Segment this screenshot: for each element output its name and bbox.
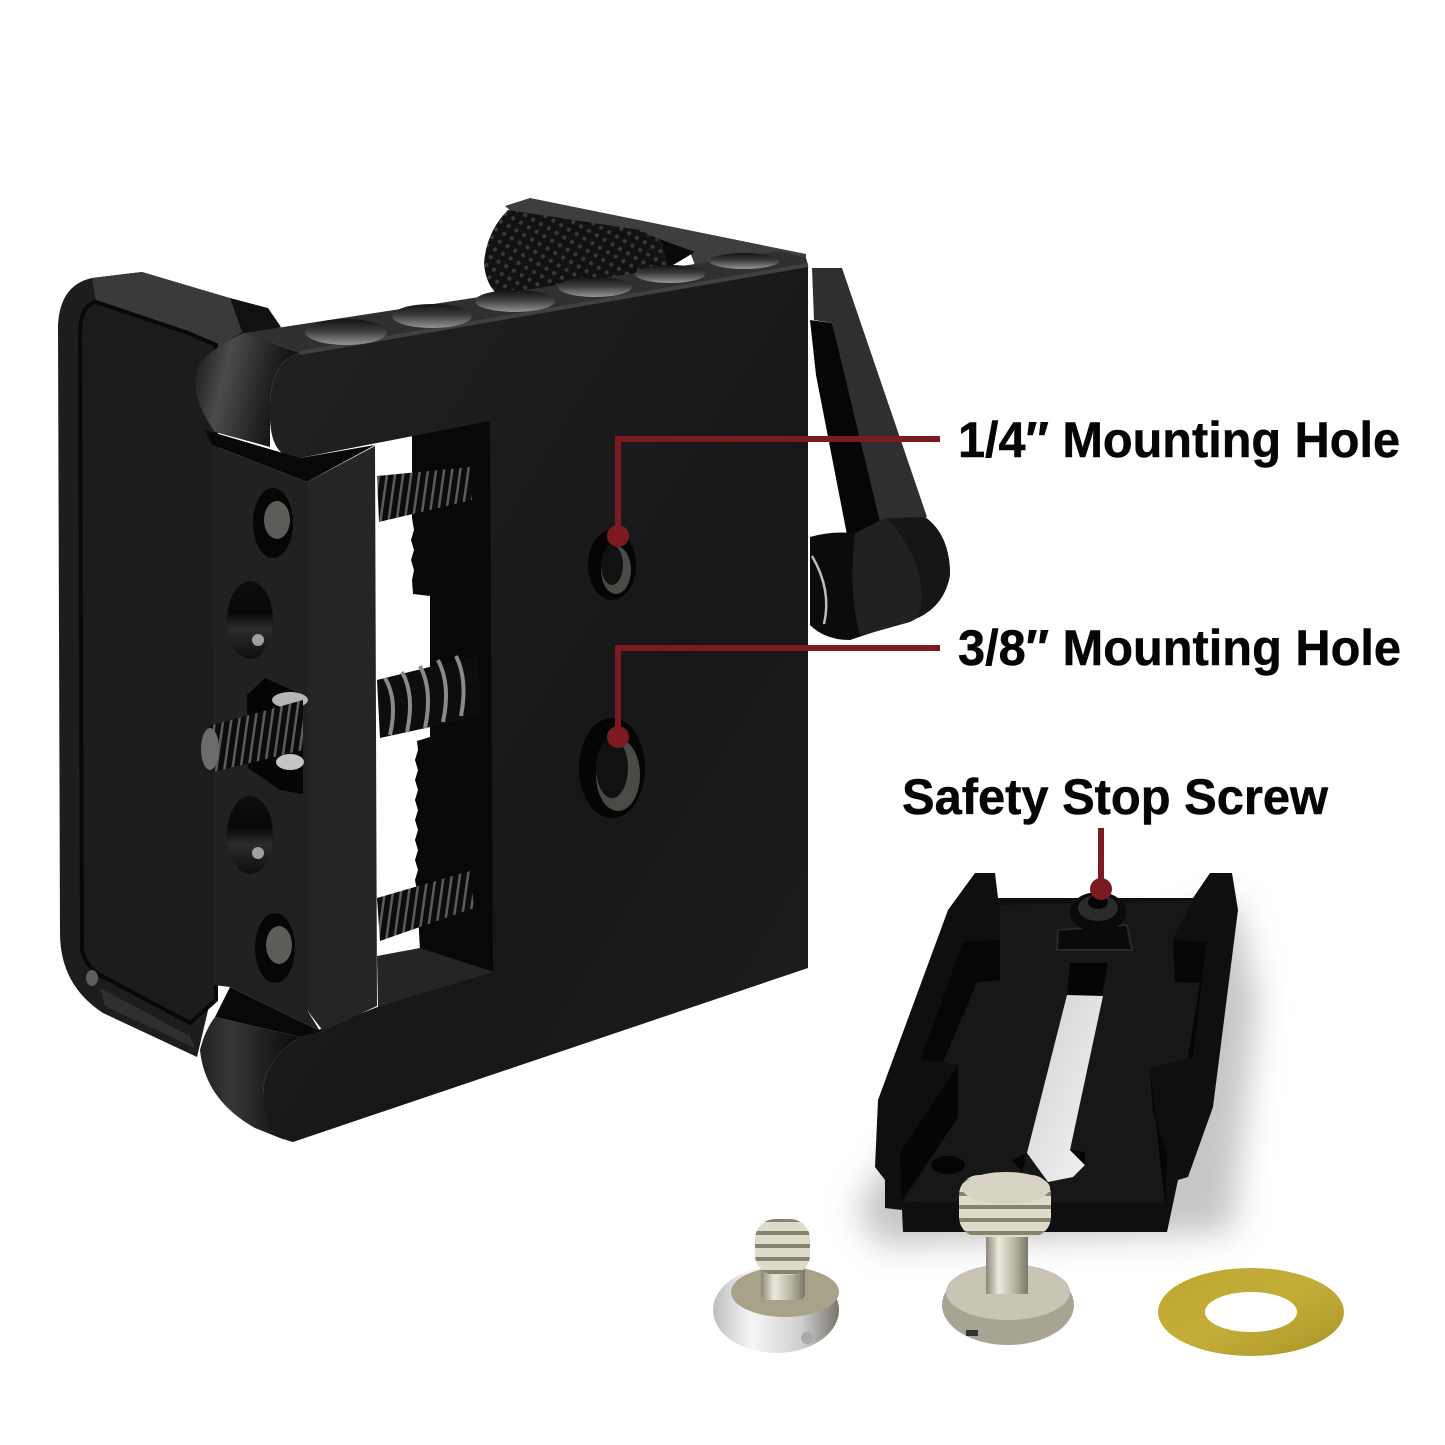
window backdrop (372, 430, 434, 965)
callout: safety stop screw (902, 769, 1328, 900)
shadow under top bar (205, 430, 375, 482)
screw thread top (377, 467, 472, 522)
crank handle (810, 268, 950, 640)
main front plate (263, 265, 808, 1142)
mounting hole 3/8 (579, 718, 645, 818)
callout: 3/8 mounting hole (607, 620, 1401, 748)
clamp block side (212, 445, 320, 1031)
brass washer (1158, 1268, 1344, 1356)
soft shadow under slide plate (855, 900, 1258, 1246)
callout: 3/8 mounting hole: 3/8″ Mounting Hole (958, 620, 1401, 676)
top face of plate with holes (244, 251, 808, 353)
small 1/4 screw (713, 1219, 839, 1353)
product: dovetail slide plate (875, 873, 1238, 1232)
bottom hinge cylinder (200, 987, 320, 1140)
window floor (377, 948, 494, 1008)
block holes and pins (227, 488, 308, 983)
plate floor (903, 900, 1200, 1203)
lower wedges (900, 1065, 958, 1200)
slot (1012, 963, 1108, 1182)
center thread bolt (201, 700, 303, 772)
rear knob and bar (484, 198, 806, 295)
small hole (931, 1156, 965, 1174)
screw thread bottom (377, 871, 474, 941)
product: clamp mount (58, 198, 950, 1142)
toothed inner block (411, 420, 494, 972)
large 3/8 screw (942, 1172, 1074, 1345)
mounting hole 1/4 (588, 530, 636, 600)
right groove (1173, 940, 1206, 1058)
left groove (923, 940, 1000, 1062)
safety stop screw (1057, 892, 1132, 950)
callout: 1/4 mounting hole: 1/4″ Mounting Hole (958, 412, 1400, 468)
top hinge cylinder (195, 333, 300, 447)
callout: 1/4 mounting hole (607, 412, 1400, 547)
callout: safety stop screw: Safety Stop Screw (902, 769, 1328, 825)
clamp block front (307, 446, 377, 1031)
spring (377, 655, 481, 738)
rear plate (58, 272, 281, 1057)
plate body (875, 873, 1238, 1232)
